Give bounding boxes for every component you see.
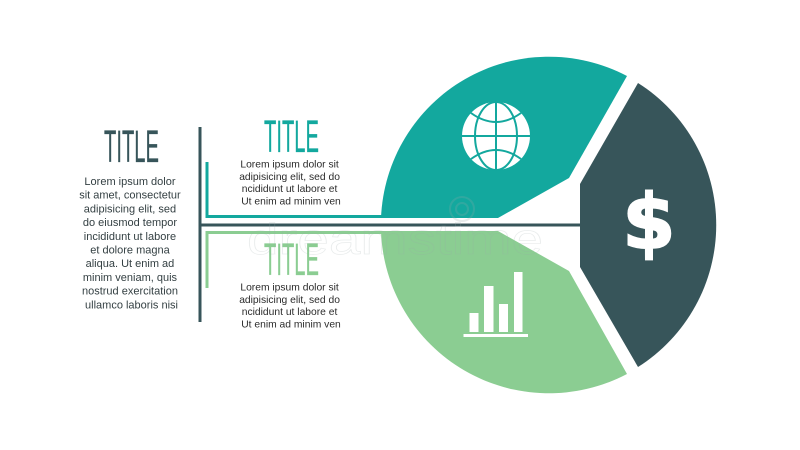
text block: green description: ncididunt ut labore et — [242, 307, 337, 318]
text block: left description: minim veniam, quis — [83, 272, 178, 284]
connector: vertical dark line and horizontal axis — [200, 127, 581, 322]
text block: green description: adipisicing elit, sed do — [239, 295, 340, 306]
panel: green text — [239, 234, 343, 330]
panel: green text: TITLE — [264, 234, 319, 285]
text block: left description: et dolore magna — [90, 244, 171, 256]
text block: teal description: Lorem ipsum dolor sit — [240, 160, 339, 170]
text block: left description: Lorem ipsum dolor — [84, 176, 176, 188]
watermark: dreamstime — [247, 215, 543, 264]
segment: teal — [381, 57, 627, 218]
text block: left description: nostrud exercitation — [82, 286, 178, 298]
segment: green — [381, 231, 627, 393]
text block: left description: incididunt ut labore — [84, 231, 176, 243]
panel: teal text — [239, 111, 343, 207]
connector: green bracket — [207, 232, 382, 288]
panel: teal text: TITLE — [264, 111, 319, 162]
panel: left column — [79, 121, 184, 311]
connector: teal bracket — [207, 162, 382, 216]
text block: teal description: Ut enim ad minim ven — [241, 196, 341, 207]
text block: left description: sit amet, consectetur — [79, 190, 181, 202]
panel: left column: TITLE — [104, 121, 159, 172]
text block: left description: adipisicing elit, sed — [84, 203, 176, 215]
text block: left description: ullamco laboris nisi — [85, 299, 178, 311]
icon: bar chart — [464, 272, 528, 337]
icon: dollar sign: $ — [623, 177, 675, 266]
watermark — [247, 197, 543, 264]
text block: teal description: adipisicing elit, sed do — [239, 172, 340, 183]
text block: green description: Ut enim ad minim ven — [241, 320, 341, 330]
segment: dark — [580, 83, 716, 367]
text block: left description: do eiusmod tempor — [83, 217, 177, 229]
icon: globe — [462, 102, 530, 170]
text block: left description: aliqua. Ut enim ad — [86, 258, 174, 270]
text block: teal description: ncididunt ut labore et — [242, 184, 337, 195]
text block: green description: Lorem ipsum dolor sit — [240, 283, 339, 294]
